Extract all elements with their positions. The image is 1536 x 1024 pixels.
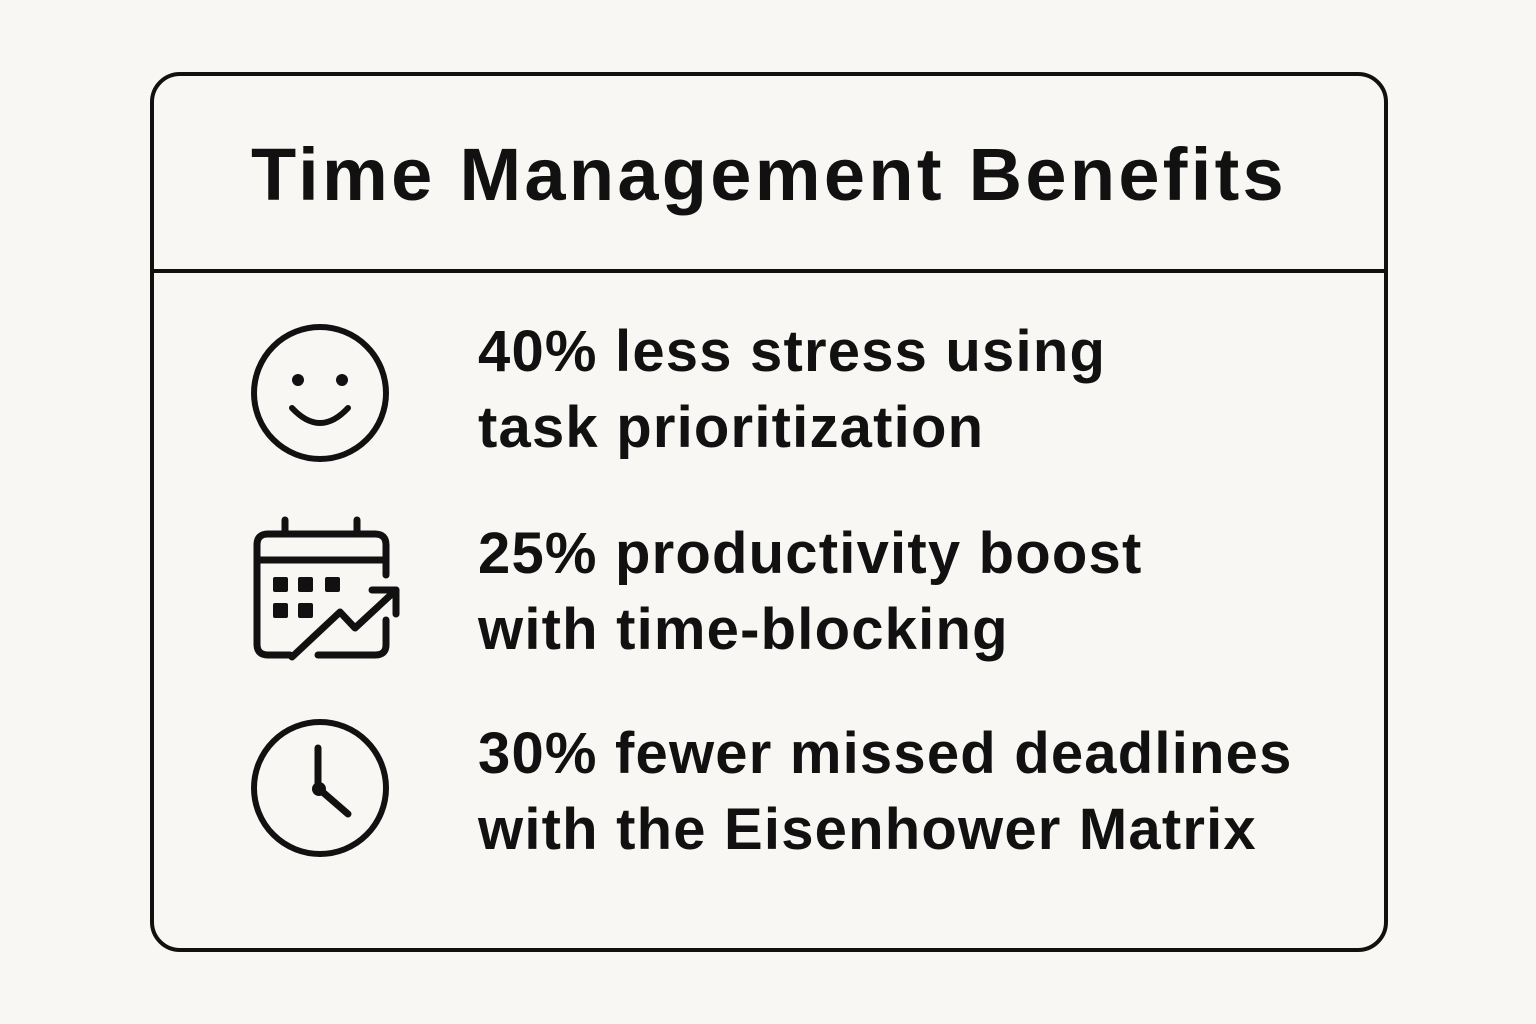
text: stress benefit: task prioritization [478, 395, 984, 460]
icon: calendar with growth arrow [257, 520, 396, 657]
icon: clock [254, 722, 386, 854]
text: deadlines benefit [478, 721, 1293, 862]
text: productivity benefit: 25% productivity boost [478, 521, 1142, 586]
text: productivity benefit: with time-blocking [478, 597, 1009, 662]
text: deadlines benefit: 30% fewer missed deadlines [478, 721, 1293, 786]
panel: benefits card [150, 72, 1388, 952]
text: productivity benefit [478, 521, 1142, 662]
icon: smiley [254, 327, 386, 459]
title: Time Management Benefits [251, 133, 1287, 216]
text: stress benefit: 40% less stress using [478, 319, 1106, 384]
text: stress benefit [478, 319, 1106, 460]
text: deadlines benefit: with the Eisenhower Matrix [478, 797, 1257, 862]
